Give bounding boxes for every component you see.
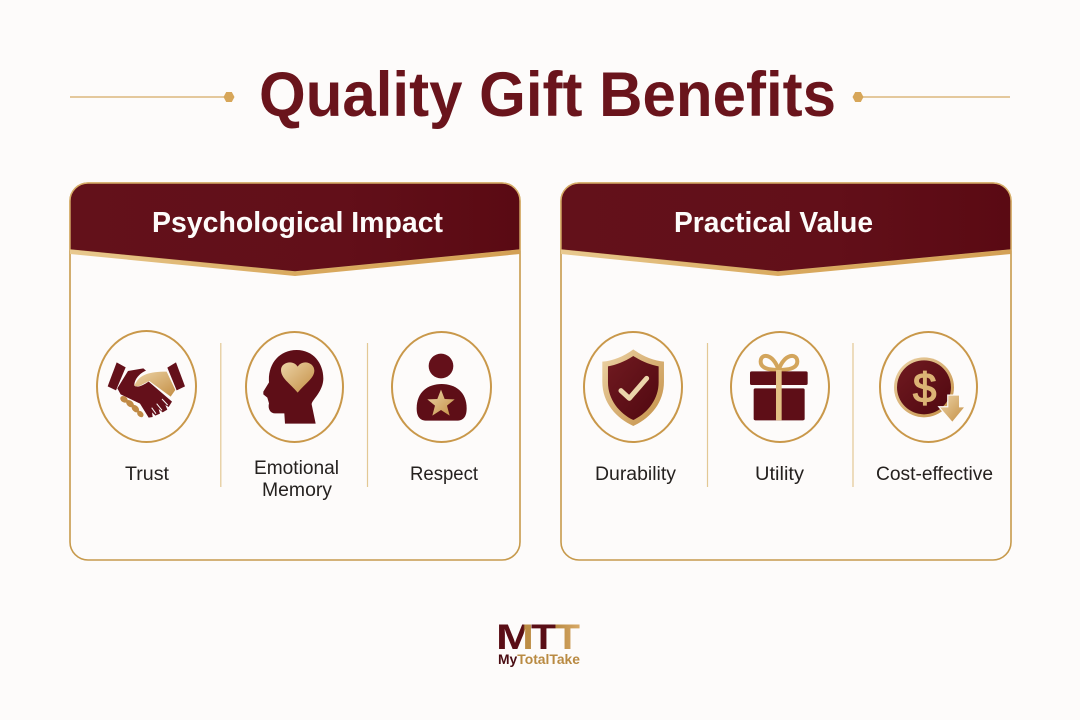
- item: Cost-effective: [876, 332, 993, 485]
- icon: shield with check: [602, 349, 664, 426]
- label: Utility: Utility: [755, 464, 805, 485]
- divider: [220, 343, 222, 487]
- logo mark: MTT: T: [531, 618, 556, 657]
- logo mark: MTT: [496, 618, 580, 657]
- header gold band: [561, 250, 1011, 276]
- logo: [496, 618, 580, 667]
- divider: [706, 343, 708, 487]
- divider: [366, 343, 368, 487]
- title ornament: right line: [852, 92, 1010, 102]
- label: Emotional Memory: Memory: [262, 480, 333, 501]
- header gold band: [70, 250, 520, 276]
- icon: coin with down arrow: [894, 357, 964, 422]
- logo wordmark: MyTotalTake: [498, 651, 580, 667]
- icon: handshake: [108, 362, 185, 418]
- label: Trust: Trust: [125, 464, 170, 485]
- header banner: Psychological Impact: [70, 183, 520, 272]
- panel: Psychological Impact: [70, 183, 520, 560]
- item: Emotional Memory: [246, 332, 343, 501]
- logo mark: MTT: T: [555, 618, 580, 657]
- label: Emotional Memory: [254, 458, 339, 501]
- label: Respect: Respect: [410, 464, 479, 485]
- label: Cost-effective: Cost-effective: [876, 464, 993, 485]
- icon: head with heart: [263, 350, 323, 424]
- label: Durability: Durability: [595, 464, 676, 485]
- header banner: Practical Value: [561, 183, 1011, 272]
- item: Trust: [97, 331, 196, 485]
- panel: Practical Value: [561, 183, 1011, 560]
- header text: Psychological Impact: [152, 207, 443, 239]
- icon: coin with down arrow: $: [913, 364, 936, 411]
- item: Utility: [731, 332, 829, 485]
- label: Emotional Memory: Emotional: [254, 458, 339, 479]
- divider: [852, 343, 854, 487]
- icon: gift box: [750, 356, 808, 420]
- title: Quality Gift Benefits: [259, 60, 836, 130]
- item: Durability: [584, 332, 682, 485]
- header text: Practical Value: [674, 207, 873, 239]
- icon: person with star: [417, 354, 467, 421]
- title ornament: left line: [70, 92, 234, 102]
- item: Respect: [392, 332, 491, 485]
- logo mark: MTT: M: [496, 618, 534, 657]
